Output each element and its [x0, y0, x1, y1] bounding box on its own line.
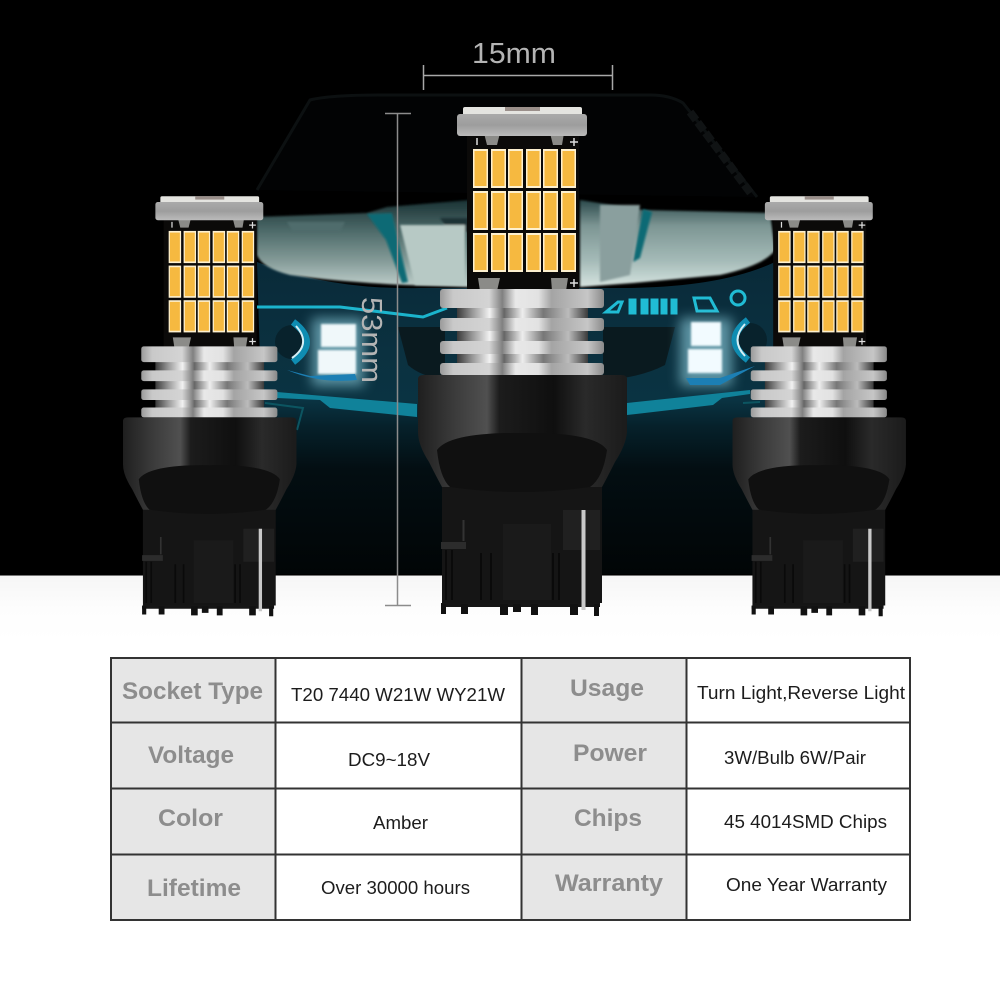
bulb: left [123, 196, 296, 616]
dimension: 15mm width [423, 38, 612, 90]
specifications table [110, 657, 910, 921]
row: color and chips: Chips [574, 805, 642, 832]
row: socket type and usage: Socket Type [122, 678, 263, 705]
row: voltage and power: 3W/Bulb 6W/Pair [724, 748, 866, 768]
label 15mm: 15mm [472, 38, 556, 70]
row: socket type and usage [122, 675, 905, 705]
photo background [0, 0, 1000, 640]
right bulb mounting cap [765, 196, 873, 220]
left headlight [275, 318, 364, 386]
grille panels [398, 327, 675, 380]
bulb: center [418, 107, 627, 616]
windshield decal [690, 112, 752, 195]
row: lifetime and warranty: Lifetime [147, 875, 241, 902]
left bulb circuit board [164, 217, 257, 349]
right bulb circuit board [773, 217, 866, 349]
row: color and chips [158, 805, 887, 833]
label 53mm: 53mm [355, 297, 387, 383]
hood right side [580, 200, 775, 287]
center bulb socket [418, 375, 627, 616]
row: socket type and usage: Turn Light,Reverse Light [697, 683, 905, 703]
bulb: right [733, 196, 906, 616]
label cell backgrounds [110, 657, 686, 921]
row: socket type and usage: Usage [570, 675, 644, 702]
row: voltage and power: Voltage [148, 742, 234, 769]
lower cyan trim [277, 390, 750, 417]
left bulb heat sink [141, 346, 277, 417]
row: lifetime and warranty: One Year Warranty [726, 875, 887, 895]
row: voltage and power [148, 740, 866, 770]
table grid [111, 658, 910, 920]
row: lifetime and warranty: Over 30000 hours [321, 878, 470, 898]
left bulb mounting cap [155, 196, 263, 220]
row: voltage and power: DC9~18V [348, 750, 430, 770]
car roof and windshield [257, 95, 757, 197]
hood details [287, 205, 652, 285]
hood left side [257, 200, 470, 287]
left bulb socket [123, 417, 296, 616]
row: voltage and power: Power [573, 740, 647, 767]
cyan segment blocks right [606, 291, 745, 313]
center bulb heat sink [440, 289, 604, 375]
dashboard cyan line left [257, 307, 447, 317]
dimension: 53mm height [355, 113, 411, 606]
row: color and chips: Amber [373, 813, 428, 833]
left bulb LED chips [169, 231, 254, 332]
center bulb circuit board [467, 132, 579, 292]
row: lifetime and warranty [147, 870, 887, 902]
right bulb heat sink [751, 346, 887, 417]
center bulb mounting cap [457, 107, 587, 136]
right bulb LED chips [778, 231, 864, 332]
row: socket type and usage: T20 7440 W21W WY21W [291, 685, 505, 705]
center bulb LED chips [473, 149, 576, 272]
lower bumper [262, 424, 776, 574]
row: lifetime and warranty: Warranty [555, 870, 664, 897]
right headlight [680, 318, 767, 386]
front blue band [257, 262, 775, 425]
car illustration [257, 95, 776, 574]
right bulb socket [733, 417, 906, 616]
row: color and chips: Color [158, 805, 223, 832]
row: color and chips: 45 4014SMD Chips [724, 812, 887, 832]
